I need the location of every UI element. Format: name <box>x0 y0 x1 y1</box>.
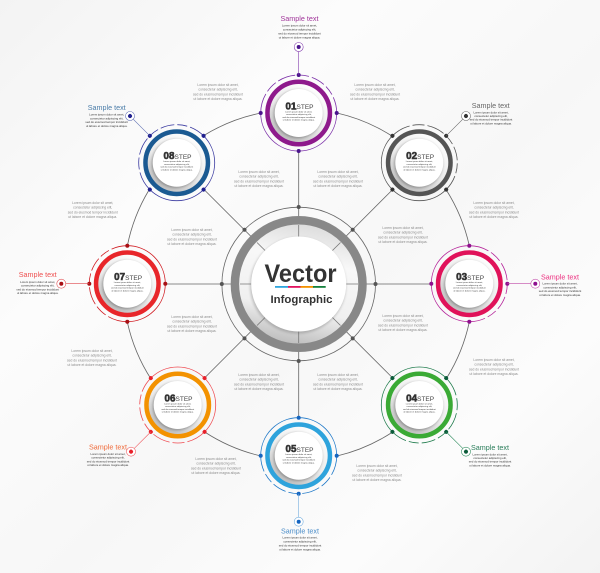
callout 06: Lorem ipsum dolor sit amet, <box>90 452 126 456</box>
step text: ut labore et dolore magna aliqua. <box>403 411 436 414</box>
step text: ut labore et dolore magna aliqua. <box>283 119 315 122</box>
disc <box>148 134 206 192</box>
disc <box>270 427 328 485</box>
text block: outer top left: consectetur adipiscing elit, <box>198 88 238 92</box>
disc <box>390 376 448 434</box>
callout 05: Sample text <box>281 526 319 536</box>
text block: inner right upper: sed do eiusmod tempor incididunt <box>378 235 428 239</box>
callout 04: consectetur adipiscing elit, <box>473 456 507 460</box>
step label <box>286 444 313 455</box>
hub disc <box>250 238 346 334</box>
pin <box>125 429 154 458</box>
pin <box>294 42 303 75</box>
step label: 06 <box>165 394 176 404</box>
callout 05: Lorem ipsum dolor sit amet, <box>282 536 318 540</box>
callout 03: consectetur adipiscing elit, <box>543 285 577 289</box>
ring <box>388 374 450 436</box>
pin <box>443 429 472 458</box>
orbit <box>363 348 476 462</box>
step text: ut labore et dolore magna aliqua. <box>283 461 315 464</box>
text block: inner top left: Lorem ipsum dolor sit amet, <box>238 170 280 174</box>
callout 08: Lorem ipsum dolor sit amet, <box>89 113 124 117</box>
callout 05: ut labore et dolore magna aliqua. <box>279 548 321 552</box>
step 06 node <box>121 348 234 462</box>
orbit <box>363 106 476 219</box>
text block: outer right upper: consectetur adipiscing elit, <box>474 206 514 210</box>
spokes <box>165 151 431 418</box>
step label: STEP <box>297 447 313 454</box>
text block: inner left upper: consectetur adipiscing elit, <box>172 233 212 237</box>
text block: inner right lower: consectetur adipiscing elit, <box>383 319 423 323</box>
text block: outer left lower: consectetur adipiscing elit, <box>72 354 112 358</box>
text block: inner top right: Lorem ipsum dolor sit amet, <box>317 170 359 174</box>
step 05 node <box>259 416 339 526</box>
step text: sed do eiusmod tempor incididunt <box>282 116 315 119</box>
step text: sed do eiusmod tempor incididunt <box>282 459 315 462</box>
step text: sed do eiusmod tempor incididunt <box>453 287 486 290</box>
callout 07: consectetur adipiscing elit, <box>21 284 55 288</box>
pin <box>294 494 303 526</box>
step label: STEP <box>297 104 313 111</box>
text block: outer top right: Lorem ipsum dolor sit amet, <box>354 83 396 87</box>
step label: 05 <box>286 444 297 455</box>
hub spoke details <box>240 225 358 343</box>
callout 04: ut labore et dolore magna aliqua. <box>469 463 511 467</box>
callout 08: sed do eiusmod tempor incididunt <box>85 120 128 124</box>
step text: Lorem ipsum dolor sit amet, <box>406 402 433 405</box>
text block: outer right upper: Lorem ipsum dolor sit amet, <box>473 201 515 205</box>
text block: outer right lower: consectetur adipiscing elit, <box>474 363 514 367</box>
orbit <box>259 416 339 496</box>
ring <box>96 253 158 315</box>
text block: outer bottom left: ut labore et dolore magna aliqua. <box>192 471 241 475</box>
step text: sed do eiusmod tempor incididunt <box>160 166 193 169</box>
pin <box>57 279 89 288</box>
step label <box>114 272 142 283</box>
step text: sed do eiusmod tempor incididunt <box>403 408 436 411</box>
text block: outer left upper: ut labore et dolore magna aliqua. <box>68 215 117 219</box>
step text: consectetur adipiscing elit, <box>114 284 141 287</box>
callout 04 <box>469 443 511 467</box>
callout 07: sed do eiusmod tempor incididunt <box>16 287 59 291</box>
disc <box>390 134 448 192</box>
text block: inner bottom left: ut labore et dolore magna aliqua. <box>235 387 284 391</box>
step text: Lorem ipsum dolor sit amet, <box>114 281 141 284</box>
step text: ut labore et dolore magna aliqua. <box>161 168 193 171</box>
step label: STEP <box>467 275 484 282</box>
step text: ut labore et dolore magna aliqua. <box>403 168 436 171</box>
step label <box>164 151 191 162</box>
callout 04: sed do eiusmod tempor incididunt <box>469 460 511 464</box>
callout 07: Lorem ipsum dolor sit amet, <box>20 280 55 284</box>
step 03 node <box>429 244 540 324</box>
central hub <box>220 205 378 363</box>
step label <box>456 272 484 283</box>
text block: outer right lower: Lorem ipsum dolor sit amet, <box>473 358 515 362</box>
callout 05: consectetur adipiscing elit, <box>283 540 317 544</box>
text block: inner top right: ut labore et dolore magna aliqua. <box>314 184 363 188</box>
callout 01 <box>278 14 321 40</box>
text block: inner right lower: Lorem ipsum dolor sit amet, <box>382 314 424 318</box>
step label <box>406 394 434 404</box>
step text: consectetur adipiscing elit, <box>165 405 191 408</box>
orbit <box>120 106 233 219</box>
title: Vector <box>264 260 337 288</box>
step label: 07 <box>114 272 126 283</box>
callout 06: consectetur adipiscing elit, <box>91 456 125 460</box>
step text: sed do eiusmod tempor incididunt <box>161 408 194 411</box>
text block: inner bottom right: ut labore et dolore magna aliqua. <box>314 387 363 391</box>
text block: inner left lower: ut labore et dolore magna aliqua. <box>168 329 217 333</box>
step label: STEP <box>175 154 191 161</box>
orbit <box>87 244 167 324</box>
step text: ut labore et dolore magna aliqua. <box>111 289 144 292</box>
text block: inner left upper: sed do eiusmod tempor incididunt <box>167 237 217 241</box>
text block: inner top right: sed do eiusmod tempor incididunt <box>313 179 363 183</box>
subtitle: Infographic <box>270 294 332 306</box>
disc <box>270 84 328 142</box>
step 01 node <box>259 42 339 153</box>
text block: inner right upper: Lorem ipsum dolor sit amet, <box>382 226 424 230</box>
text block: inner right lower: sed do eiusmod tempor incididunt <box>378 323 428 327</box>
ring <box>388 132 450 194</box>
callout 05: sed do eiusmod tempor incididunt <box>279 544 321 548</box>
step label: 03 <box>456 272 468 283</box>
text block: outer left upper: consectetur adipiscing elit, <box>73 206 112 210</box>
step text: Lorem ipsum dolor sit amet, <box>164 402 192 405</box>
text block: outer top left: ut labore et dolore magna aliqua. <box>194 97 243 101</box>
text block: outer left lower: ut labore et dolore magna aliqua. <box>68 363 117 367</box>
text block: outer left lower: Lorem ipsum dolor sit amet, <box>71 349 113 353</box>
callout 03: sed do eiusmod tempor incididunt <box>539 289 581 293</box>
text block: outer left upper: Lorem ipsum dolor sit amet, <box>72 201 113 205</box>
step text: Lorem ipsum dolor sit amet, <box>163 160 191 163</box>
orbit <box>259 73 339 153</box>
text block: outer bottom left: sed do eiusmod tempor incididunt <box>191 466 241 470</box>
step label: STEP <box>176 396 192 403</box>
text block: inner top right: consectetur adipiscing elit, <box>318 175 358 179</box>
disc <box>149 376 207 434</box>
text block: outer left lower: sed do eiusmod tempor incididunt <box>67 358 117 362</box>
callout 06 <box>87 442 129 467</box>
callout 06: Sample text <box>89 442 127 452</box>
text block: inner left upper: ut labore et dolore magna aliqua. <box>168 242 217 246</box>
callout 01: ut labore et dolore magna aliqua. <box>279 36 320 40</box>
text block: inner bottom right: sed do eiusmod tempor incididunt <box>313 382 363 386</box>
step label: 08 <box>164 151 175 162</box>
callout 07 <box>16 270 59 295</box>
step label <box>286 102 313 112</box>
text block: inner bottom right: Lorem ipsum dolor sit amet, <box>317 373 359 377</box>
step 08 node <box>120 106 233 219</box>
step text: Lorem ipsum dolor sit amet, <box>456 281 483 284</box>
text block: inner left lower: sed do eiusmod tempor incididunt <box>167 324 217 328</box>
step text: consectetur adipiscing elit, <box>406 163 433 166</box>
ring <box>268 82 330 144</box>
colour bar <box>275 286 326 288</box>
callout 08: Sample text <box>88 103 126 112</box>
text block: outer top left: Lorem ipsum dolor sit amet, <box>197 83 239 87</box>
step text: ut labore et dolore magna aliqua. <box>162 411 194 414</box>
step 04 node <box>363 348 476 462</box>
text block: inner top left: ut labore et dolore magna aliqua. <box>235 184 284 188</box>
step text: ut labore et dolore magna aliqua. <box>453 289 486 292</box>
text block: outer top right: consectetur adipiscing elit, <box>355 88 395 92</box>
callout 07: Sample text <box>19 270 57 279</box>
text block: outer bottom left: consectetur adipiscing elit, <box>196 462 236 466</box>
callout 05 <box>279 526 321 552</box>
text block: outer bottom right: sed do eiusmod tempor incididunt <box>352 473 402 477</box>
step text: Lorem ipsum dolor sit amet, <box>406 160 433 163</box>
callout 02: sed do eiusmod tempor incididunt <box>470 118 512 122</box>
callout 04: Sample text <box>471 443 509 452</box>
callout 08: consectetur adipiscing elit, <box>90 116 124 120</box>
step text: sed do eiusmod tempor incididunt <box>403 166 436 169</box>
text block: inner left upper: Lorem ipsum dolor sit amet, <box>171 228 213 232</box>
step label <box>165 394 192 404</box>
callout 03: Lorem ipsum dolor sit amet, <box>542 282 578 286</box>
text block: inner bottom left: Lorem ipsum dolor sit amet, <box>238 373 280 377</box>
pin <box>124 110 153 139</box>
connecting arcs <box>127 113 469 456</box>
callout 01: Lorem ipsum dolor sit amet, <box>282 24 317 28</box>
orbit <box>121 348 234 462</box>
text block: outer top right: sed do eiusmod tempor incididunt <box>350 92 400 96</box>
text block: inner top left: consectetur adipiscing elit, <box>239 175 279 179</box>
step label: STEP <box>417 396 434 403</box>
orbit <box>429 244 509 324</box>
callout 08 <box>85 103 128 128</box>
hub thin ring with dots <box>220 205 378 363</box>
text block: inner bottom left: sed do eiusmod tempor incididunt <box>234 382 284 386</box>
callout 01: sed do eiusmod tempor incididunt <box>278 32 321 36</box>
disc <box>440 255 498 313</box>
step text: consectetur adipiscing elit, <box>406 405 433 408</box>
callout 03: Sample text <box>541 272 579 282</box>
text block: inner right upper: consectetur adipiscing elit, <box>383 231 423 235</box>
text block: outer right lower: ut labore et dolore magna aliqua. <box>470 372 519 376</box>
text block: inner left lower: consectetur adipiscing elit, <box>172 320 212 324</box>
step text: consectetur adipiscing elit, <box>164 163 190 166</box>
callout 02 <box>470 101 512 125</box>
hub grey ring <box>235 220 362 348</box>
step label: 01 <box>286 102 297 112</box>
text block: outer top left: sed do eiusmod tempor incididunt <box>193 92 243 96</box>
pin <box>443 110 472 139</box>
callout 02: consectetur adipiscing elit, <box>474 114 508 118</box>
callout 03: ut labore et dolore magna aliqua. <box>539 293 581 297</box>
callout 01: consectetur adipiscing elit, <box>283 28 316 32</box>
callout 03 <box>539 272 581 297</box>
callout 02: Lorem ipsum dolor sit amet, <box>473 110 509 114</box>
text block: outer right upper: sed do eiusmod tempor incididunt <box>469 210 519 214</box>
step 07 node <box>57 244 167 324</box>
ring <box>438 253 500 315</box>
text block: outer top right: ut labore et dolore magna aliqua. <box>351 97 400 101</box>
text block: outer left upper: sed do eiusmod tempor incididunt <box>68 210 118 214</box>
text block: outer right lower: sed do eiusmod tempor incididunt <box>469 367 519 371</box>
step label: STEP <box>125 275 142 282</box>
text block: outer bottom right: Lorem ipsum dolor sit amet, <box>356 464 398 468</box>
step label: STEP <box>417 154 434 161</box>
ring <box>147 374 209 436</box>
text block: inner left lower: Lorem ipsum dolor sit amet, <box>171 315 213 319</box>
text block: outer bottom left: Lorem ipsum dolor sit amet, <box>195 457 237 461</box>
callout 07: ut labore et dolore magna aliqua. <box>17 291 59 295</box>
disc <box>98 255 156 313</box>
step text: Lorem ipsum dolor sit amet, <box>285 110 313 113</box>
grey text blocks <box>67 83 519 482</box>
ring <box>268 425 330 487</box>
text block: outer bottom right: ut labore et dolore magna aliqua. <box>353 478 402 482</box>
step label <box>406 151 434 162</box>
callout 04: Lorem ipsum dolor sit amet, <box>472 452 508 456</box>
text block: inner right lower: ut labore et dolore magna aliqua. <box>379 328 428 332</box>
step text: consectetur adipiscing elit, <box>286 456 312 459</box>
step text: Lorem ipsum dolor sit amet, <box>285 453 313 456</box>
text block: inner bottom left: consectetur adipiscing elit, <box>239 378 279 382</box>
step 02 node <box>363 106 476 219</box>
text block: inner top left: sed do eiusmod tempor incididunt <box>234 179 284 183</box>
step text: consectetur adipiscing elit, <box>286 113 312 116</box>
step text: consectetur adipiscing elit, <box>456 284 483 287</box>
pin <box>507 279 540 288</box>
callout 06: ut labore et dolore magna aliqua. <box>87 463 129 467</box>
step text: sed do eiusmod tempor incididunt <box>111 287 144 290</box>
callout 02: Sample text <box>472 101 510 110</box>
hub recessed well <box>239 224 359 344</box>
text block: inner right upper: ut labore et dolore magna aliqua. <box>379 240 428 244</box>
step label: 02 <box>406 151 418 162</box>
callout 01: Sample text <box>281 14 318 23</box>
ring <box>146 132 208 194</box>
callout 02: ut labore et dolore magna aliqua. <box>470 121 512 125</box>
text block: outer right upper: ut labore et dolore magna aliqua. <box>470 215 519 219</box>
callout 08: ut labore et dolore magna aliqua. <box>86 124 128 128</box>
callout 06: sed do eiusmod tempor incididunt <box>87 459 129 463</box>
text block: inner bottom right: consectetur adipiscing elit, <box>318 378 358 382</box>
step label: 04 <box>406 394 418 404</box>
text block: outer bottom right: consectetur adipiscing elit, <box>357 469 397 473</box>
